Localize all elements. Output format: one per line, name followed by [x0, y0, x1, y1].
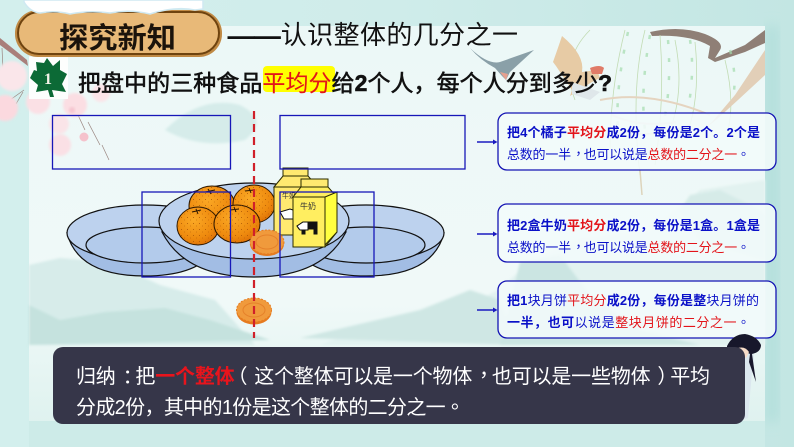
mooncake: on plate	[250, 230, 284, 256]
arrow: mooncake	[477, 308, 498, 312]
callout: oranges: 总数的一半	[507, 147, 571, 162]
callout: oranges: 。	[741, 143, 754, 158]
background: swallows	[470, 36, 604, 100]
callout: milk: 把2盒牛奶平均分成2份，每份是1盒。1盒是	[507, 218, 760, 233]
callout: oranges: ，	[575, 142, 588, 158]
callout: milk: 也	[584, 240, 597, 255]
summary panel: 。	[451, 391, 471, 413]
summary panel	[53, 347, 745, 424]
snow cap	[24, 0, 203, 14]
callout: milk: 可以说是总数的二分之一	[596, 240, 737, 255]
title plaque	[15, 0, 222, 57]
callout: mooncake: 。	[741, 311, 754, 326]
callout: milk: ，	[575, 236, 588, 250]
milk carton: front: 牛奶	[300, 201, 316, 211]
title text: 探究新知	[59, 22, 176, 55]
background: willow branch and leaves	[570, 29, 765, 195]
answer box: top left	[52, 116, 230, 169]
summary panel: 可以是一些物体 ）平均	[512, 366, 710, 388]
milk carton: back	[274, 168, 318, 235]
plate: centre	[159, 183, 349, 277]
callout: milk: 总数的一半	[507, 240, 571, 255]
icon: number leaf	[29, 57, 68, 99]
character figure	[727, 334, 761, 420]
summary panel: 分成2份，其中的1份是这个整体的二分之一	[76, 397, 446, 419]
callout: milk: 。	[741, 236, 754, 251]
callout: mooncake	[498, 281, 776, 338]
subtitle: ——认识整体的几分之一	[228, 20, 518, 50]
dividing dashed line	[253, 111, 255, 338]
arrow: oranges	[477, 140, 498, 144]
background: mountains	[29, 103, 765, 345]
milk carton: front	[293, 179, 337, 247]
callout: milk	[498, 204, 776, 262]
background: cherry blossom	[0, 38, 110, 160]
icon: number leaf: 1	[44, 71, 52, 88]
plate: left	[67, 205, 223, 276]
answer box: lower left	[142, 192, 230, 277]
callout: oranges	[498, 113, 776, 170]
answer box: lower right	[280, 192, 374, 277]
oranges	[177, 185, 275, 245]
milk carton: back: 牛奶	[282, 191, 296, 200]
question text: 把盘中的三种食品平均分给2个人，每个人分到多少?	[78, 70, 612, 96]
plate: right	[288, 205, 444, 276]
summary panel: ，	[479, 359, 499, 381]
callout: oranges: 也	[584, 147, 597, 162]
callout: mooncake: 一半，也可以说是整块月饼的二分之一	[507, 315, 736, 330]
summary panel: 归纳 ：把一个整体（ 这个整体可以是一个物体	[76, 366, 472, 388]
mooncake: below plate	[236, 298, 272, 324]
question highlight	[263, 66, 335, 92]
answer box: top right	[280, 116, 465, 169]
callout: oranges: 把4个橘子平均分成2份，每份是2个。2个是	[507, 125, 760, 140]
callout: mooncake: 把1块月饼平均分成2份，每份是整块月饼的	[507, 293, 759, 308]
callout: oranges: 可以说是总数的二分之一	[596, 147, 737, 162]
summary panel: 也	[492, 365, 512, 388]
arrow: milk	[477, 232, 498, 236]
